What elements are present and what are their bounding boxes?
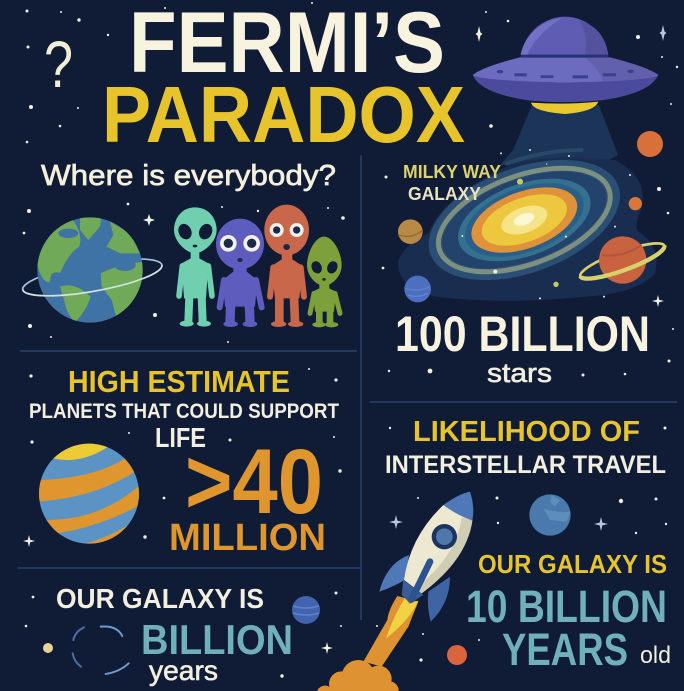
icon: light beam — [500, 105, 618, 170]
text: life: LIFE — [155, 422, 206, 453]
heading: high estimate: HIGH ESTIMATE — [68, 364, 290, 399]
icon: question mark: ? — [44, 27, 73, 101]
icon: blue planet — [529, 494, 571, 536]
heading: where is everybody: Where is everybody? — [41, 160, 336, 192]
text: planets that could support: PLANETS THAT COULD SUPPORT — [29, 400, 339, 423]
icon: small orange planet — [447, 645, 467, 665]
text: old: old — [640, 642, 671, 669]
heading: our galaxy is: OUR GALAXY IS — [56, 583, 264, 614]
icon: small blue planet — [292, 596, 320, 624]
icon: striped planet — [37, 438, 140, 545]
alien: green — [307, 237, 342, 327]
stat: years: YEARS — [502, 624, 628, 675]
alien: teal — [174, 207, 217, 327]
icon: small cream planet — [43, 643, 53, 653]
illustration: Milky Way galaxy — [398, 131, 667, 304]
stat: 100 billion: 100 BILLION — [395, 306, 650, 362]
alien: purple — [216, 219, 264, 327]
title: Paradox: PARADOX — [102, 70, 465, 159]
text: years: years — [149, 655, 218, 686]
heading: likelihood of: LIKELIHOOD OF — [413, 416, 640, 448]
stat: billion: BILLION — [141, 616, 293, 663]
illustration: group of aliens — [174, 205, 342, 327]
illustration: rocket — [317, 492, 473, 691]
stat: million: MILLION — [169, 517, 326, 559]
icon: flying saucer — [473, 17, 658, 114]
icon: faint dashed ring — [73, 626, 129, 674]
heading: our galaxy is (right): OUR GALAXY IS — [478, 549, 667, 579]
alien: red — [264, 205, 309, 327]
illustration: Earth with ring — [20, 217, 164, 323]
text: interstellar travel: INTERSTELLAR TRAVEL — [385, 451, 666, 479]
label: Galaxy: GALAXY — [408, 184, 481, 204]
stat: greater than 40: >40 — [185, 431, 323, 533]
label: Milky Way: MILKY WAY — [403, 162, 501, 182]
text: stars: stars — [487, 358, 552, 388]
